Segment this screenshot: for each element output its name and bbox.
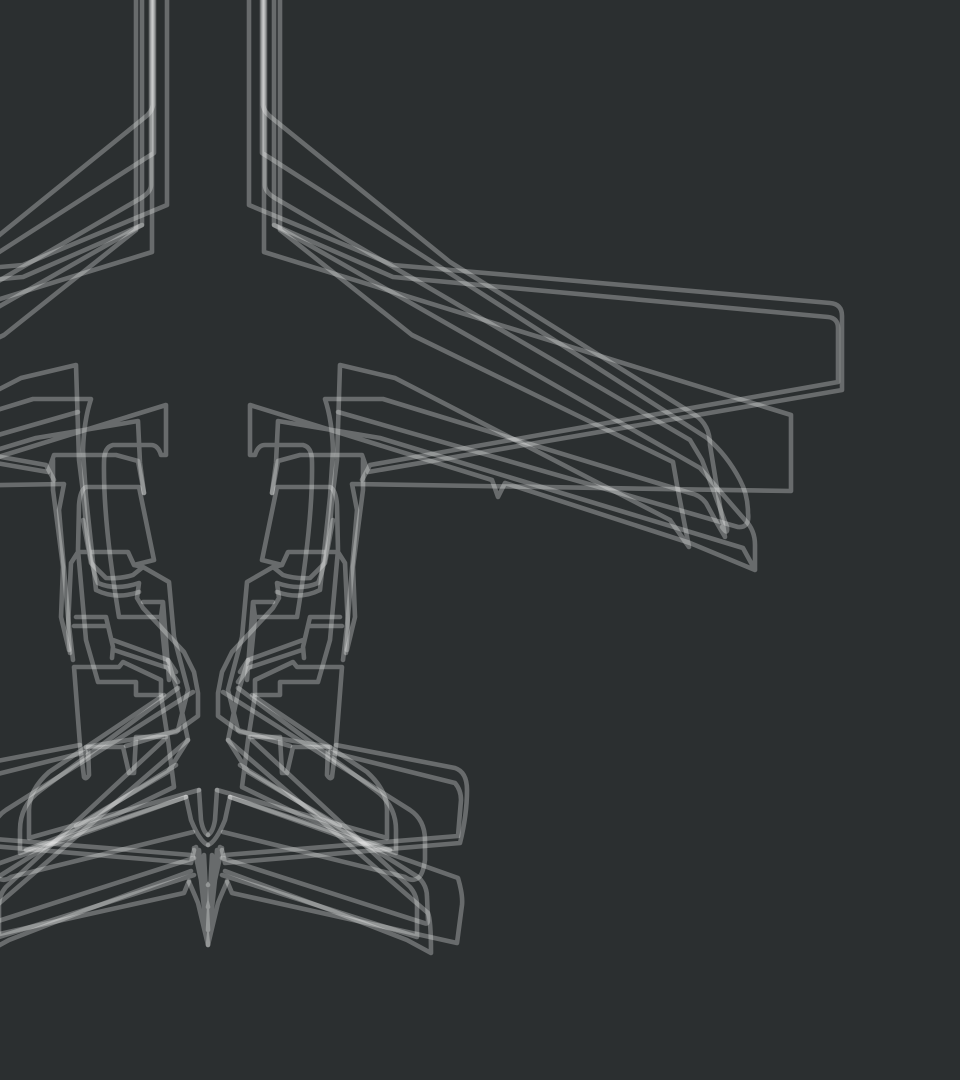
aircraft outline: swept wing with pointed tip <box>0 225 755 680</box>
horizontal tail: square tip <box>0 797 462 943</box>
horizontal tail: curved tip, rear <box>0 765 428 924</box>
aircraft outline: swept wing with kinked leading edge <box>0 0 689 747</box>
horizontal tail: lower swept <box>0 740 417 937</box>
horizontal tail: pointed tip <box>0 740 431 953</box>
aircraft outline: straight wing, inner <box>0 0 838 480</box>
horizontal tail: middle curve <box>20 688 396 853</box>
aircraft outline: swept wing with curved tip <box>0 0 748 527</box>
horizontal tail: curved swept <box>0 692 425 880</box>
horizontal tail: rounded inner <box>0 752 461 855</box>
aircraft outline: swept wing with rounded tip <box>0 0 725 596</box>
horizontal tail: rounded outer <box>0 745 467 863</box>
fuselage: stepped rear sections <box>74 617 342 778</box>
horizontal tail: inner curve <box>29 695 387 838</box>
fuselage: centre body sections <box>26 487 390 850</box>
tail cone: centre spikes <box>186 790 230 945</box>
aircraft outline: swept wing, second <box>0 0 727 532</box>
aircraft outline: square tip wing <box>0 0 791 660</box>
aircraft outline: straight wing, outer <box>0 0 842 650</box>
